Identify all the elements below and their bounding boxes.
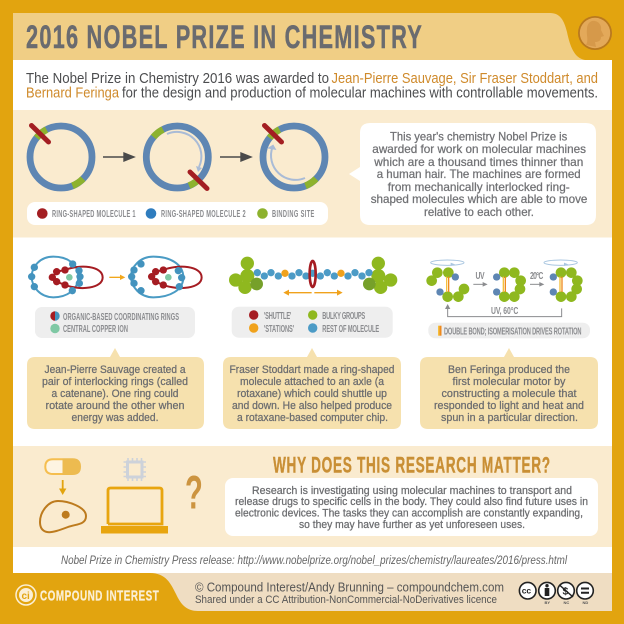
legend: rings: RING-SHAPED MOLECULE 2 (161, 208, 246, 219)
callout: overview: from mechanically interlocked ring- (388, 180, 570, 194)
title band (13, 13, 585, 60)
diagram: ring 3 (263, 126, 325, 188)
intro text: Jean-Pierre Sauvage, Sir Fraser Stoddart, and (332, 71, 598, 87)
callout: research: electronic devices. The tasks they can accomplish are constantly expanding, (235, 508, 583, 520)
panel: ring shuttle (13, 110, 612, 238)
callout: Sauvage (27, 348, 204, 429)
legend: catenane: CENTRAL COPPER ION (63, 323, 128, 334)
legend: catenane (35, 307, 195, 338)
callout: Sauvage: rotate around the other when (46, 400, 184, 412)
callout: research (225, 478, 598, 536)
callout: Sauvage: energy was added. (72, 412, 158, 424)
legend: rotaxane (232, 307, 393, 338)
icon: creative commons licence: NC (564, 600, 569, 605)
callout: overview: shaped molecules which are able to move (371, 192, 588, 206)
callout: research: Research is investigating using molecular machines to transport and (252, 485, 572, 497)
callout: Sauvage: pair of interlocking rings (called (42, 376, 188, 388)
icon: nobel medal (578, 16, 612, 50)
callout: overview: relative to each other. (424, 205, 534, 219)
intro text: The Nobel Prize in Chemistry 2016 was awarded to (26, 71, 329, 87)
icon: cell (40, 501, 86, 532)
intro text (26, 71, 598, 102)
callout: Feringa: constructing a molecule that (442, 388, 576, 400)
callout: Stoddart (223, 348, 401, 429)
callout: Feringa: spun in a particular direction. (441, 412, 578, 424)
callout: Feringa (420, 348, 598, 429)
diagram: ring 2 (146, 126, 208, 188)
callout: overview: This year's chemistry Nobel Prize is (390, 130, 567, 144)
icon: laptop (101, 488, 168, 534)
callout: overview: a human hair. The machines are formed (377, 167, 581, 181)
callout: overview: awarded for work on molecular machines (372, 142, 586, 156)
callout: Stoddart: a rotaxane-based computer chip. (237, 412, 388, 424)
icon: microchip (124, 458, 146, 481)
intro text: Bernard Feringa (26, 86, 120, 102)
callout: research: release drugs to specific cells in the body. They could also find future uses in (235, 496, 588, 508)
icon: creative commons licence: ND (582, 600, 588, 605)
icon: creative commons licence: cc (522, 586, 531, 596)
logo: compound interest: COMPOUND INTEREST (40, 588, 159, 604)
label: UV: UV (476, 270, 485, 281)
icon: creative commons licence: $ (562, 586, 568, 598)
diagram: catenane (28, 257, 202, 297)
icon: drug capsule (45, 458, 81, 475)
credit text: Shared under a CC Attribution-NonCommercial-NoDerivatives licence (195, 594, 497, 606)
footer (16, 573, 612, 611)
title: 2016 NOBEL PRIZE IN CHEMISTRY (26, 19, 422, 55)
callout: overview (349, 123, 596, 225)
label: UV, 60°C: UV, 60°C (491, 305, 518, 316)
arrow (220, 153, 251, 161)
legend: double bond: DOUBLE BOND; ISOMERISATION DRIVES ROTATION (444, 326, 582, 337)
callout: Stoddart: Fraser Stoddart made a ring-shaped (230, 364, 394, 376)
callout: Sauvage: Jean-Pierre Sauvage created a (44, 364, 186, 376)
callout: Sauvage: a catenane). One ring could (52, 388, 178, 400)
legend: catenane: ORGANIC-BASED COORDINATING RINGS (63, 311, 179, 322)
callout: overview: which are a thousand times thinner than (373, 155, 583, 169)
legend: rings: RING-SHAPED MOLECULE 1 (52, 208, 136, 219)
heading: why: WHY DOES THIS RESEARCH MATTER? (273, 452, 550, 478)
diagram: molecular motor (426, 260, 583, 317)
legend: rotaxane: 'STATIONS' (264, 323, 294, 334)
credit text: © Compound Interest/Andy Brunning – compoundchem.com (195, 580, 504, 594)
callout: Feringa: Ben Feringa produced the (448, 364, 570, 376)
source line (13, 547, 612, 573)
legend: rings (27, 202, 328, 225)
icon: creative commons licence: BY (544, 600, 550, 605)
legend: rotaxane: BULKY GROUPS (322, 310, 366, 321)
callout: Stoddart: and down. He also helped produce (232, 400, 392, 412)
diagram: rotaxane (229, 257, 397, 296)
icon: question mark: ? (185, 468, 203, 519)
panel: laureates (13, 238, 612, 446)
diagram: ring 1 (30, 126, 92, 188)
callout: Feringa: first molecular motor by (452, 376, 566, 388)
icon: creative commons licence (519, 582, 593, 605)
logo: compound interest: ci (22, 591, 30, 602)
arrow (59, 480, 66, 495)
panel: why it matters (13, 446, 612, 547)
callout: Stoddart: rotaxane) which could shuttle up (237, 388, 387, 400)
legend: double bond (428, 323, 590, 338)
callout: Feringa: responded to light and heat and (434, 400, 584, 412)
legend: rotaxane: REST OF MOLECULE (322, 323, 380, 334)
label: 20°C: 20°C (530, 270, 543, 281)
legend: rotaxane: 'SHUTTLE' (264, 310, 291, 321)
callout: Stoddart: molecule attached to an axle (a (240, 376, 385, 388)
arrow (103, 153, 134, 161)
legend: rings: BINDING SITE (272, 208, 315, 219)
credit text (195, 580, 504, 606)
intro panel (13, 60, 612, 110)
callout: research: so they may have further as yet unforeseen uses. (299, 519, 525, 531)
logo: compound interest (16, 585, 159, 605)
